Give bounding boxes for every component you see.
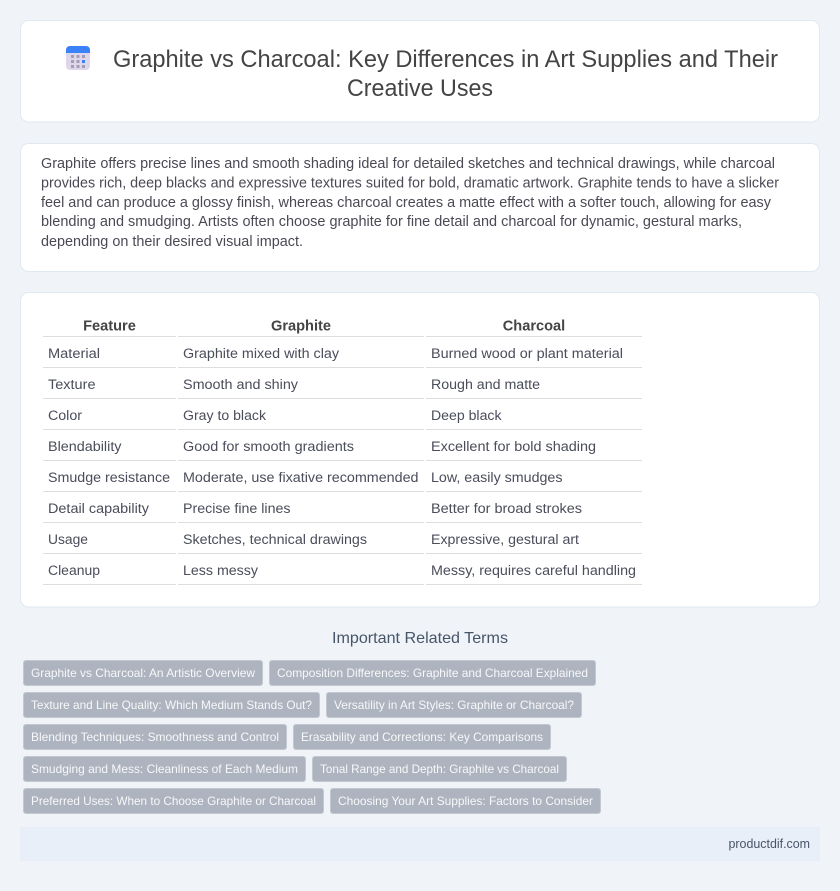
row: smudge resistance xyxy=(48,470,562,486)
text block: introduction: provides rich, deep blacks and expressive textures suited for bold, dramatic artwork. Graphite tends to have a slicker xyxy=(41,176,779,192)
row: blendability: Good for smooth gradients xyxy=(183,439,354,455)
row: smudge resistance: Moderate, use fixative recommended xyxy=(183,470,418,486)
row: blendability: Blendability xyxy=(48,439,122,455)
panel: related term tags xyxy=(24,660,600,814)
row: usage: Sketches, technical drawings xyxy=(183,532,367,548)
table header: Charcoal xyxy=(503,319,565,335)
table header xyxy=(83,319,565,335)
row: smudge resistance: Low, easily smudges xyxy=(431,470,562,486)
text block: introduction: Graphite offers precise lines and smooth shading ideal for detailed sketches and technical drawings, while charcoal xyxy=(41,156,775,172)
row: color: Color xyxy=(48,408,82,424)
tag xyxy=(326,692,582,718)
row: cleanup: Messy, requires careful handling xyxy=(431,563,636,579)
row: material: Material xyxy=(48,346,100,362)
tag: Blending Techniques: Smoothness and Control xyxy=(31,730,279,744)
row: blendability: Excellent for bold shading xyxy=(431,439,596,455)
row: cleanup xyxy=(48,563,636,579)
row: cleanup: Cleanup xyxy=(48,563,100,579)
row: texture: Texture xyxy=(48,377,96,393)
footer: productdif.com xyxy=(728,836,810,851)
row: smudge resistance: Smudge resistance xyxy=(48,470,170,486)
title: Creative Uses xyxy=(347,75,493,102)
tag xyxy=(330,788,600,814)
tag: Tonal Range and Depth: Graphite vs Charcoal xyxy=(320,762,559,776)
panel: header xyxy=(20,20,820,122)
tag xyxy=(24,756,306,782)
row: material: Burned wood or plant material xyxy=(431,346,623,362)
tag: Texture and Line Quality: Which Medium Stands Out? xyxy=(31,698,312,712)
tag xyxy=(24,788,324,814)
title xyxy=(113,46,778,102)
row: color: Deep black xyxy=(431,408,502,424)
row: detail capability: Better for broad strokes xyxy=(431,501,582,517)
row: material: Graphite mixed with clay xyxy=(183,346,340,362)
table header: Graphite xyxy=(271,319,331,335)
row: detail capability: Detail capability xyxy=(48,501,150,517)
panel: introduction text xyxy=(20,144,820,272)
row: color: Gray to black xyxy=(183,408,267,424)
row: usage: Usage xyxy=(48,532,88,548)
tag: Choosing Your Art Supplies: Factors to Consider xyxy=(338,794,593,808)
tag: Composition Differences: Graphite and Charcoal Explained xyxy=(277,666,588,680)
text block: introduction: feel and can produce a glossy finish, whereas charcoal creates a matte effect with a softer touch, allowing for easy xyxy=(41,195,772,211)
row: usage xyxy=(48,532,579,548)
row: detail capability: Precise fine lines xyxy=(183,501,290,517)
tag xyxy=(312,756,566,782)
row: material xyxy=(48,346,623,362)
table header: Feature xyxy=(83,319,136,335)
tag xyxy=(24,724,286,750)
text block: introduction xyxy=(41,156,779,250)
row: texture: Rough and matte xyxy=(431,377,540,393)
row: cleanup: Less messy xyxy=(183,563,259,579)
tag xyxy=(24,660,262,686)
tag xyxy=(270,660,596,686)
text block: introduction: blending and smudging. Artists often choose graphite for fine detail and charcoal for dynamic, gestural marks, xyxy=(41,214,742,230)
tag: Preferred Uses: When to Choose Graphite or Charcoal xyxy=(31,794,316,808)
tag xyxy=(24,692,320,718)
title: Graphite vs Charcoal: Key Differences in Art Supplies and Their xyxy=(113,46,778,73)
tag: Versatility in Art Styles: Graphite or Charcoal? xyxy=(334,698,574,712)
tag: Smudging and Mess: Cleanliness of Each Medium xyxy=(31,762,298,776)
row: blendability xyxy=(48,439,596,455)
row: texture xyxy=(48,377,540,393)
panel: comparison table xyxy=(20,292,820,607)
heading: important related terms: Important Related Terms xyxy=(332,630,508,647)
tag: Graphite vs Charcoal: An Artistic Overview xyxy=(31,666,255,680)
icon: calendar xyxy=(66,46,90,70)
row: color xyxy=(48,408,502,424)
row: texture: Smooth and shiny xyxy=(183,377,299,393)
tag xyxy=(294,724,550,750)
row: usage: Expressive, gestural art xyxy=(431,532,579,548)
text block: introduction: depending on their desired visual impact. xyxy=(41,234,303,250)
tag: Erasability and Corrections: Key Comparisons xyxy=(301,730,543,744)
row: detail capability xyxy=(48,501,582,517)
footer xyxy=(20,827,820,861)
